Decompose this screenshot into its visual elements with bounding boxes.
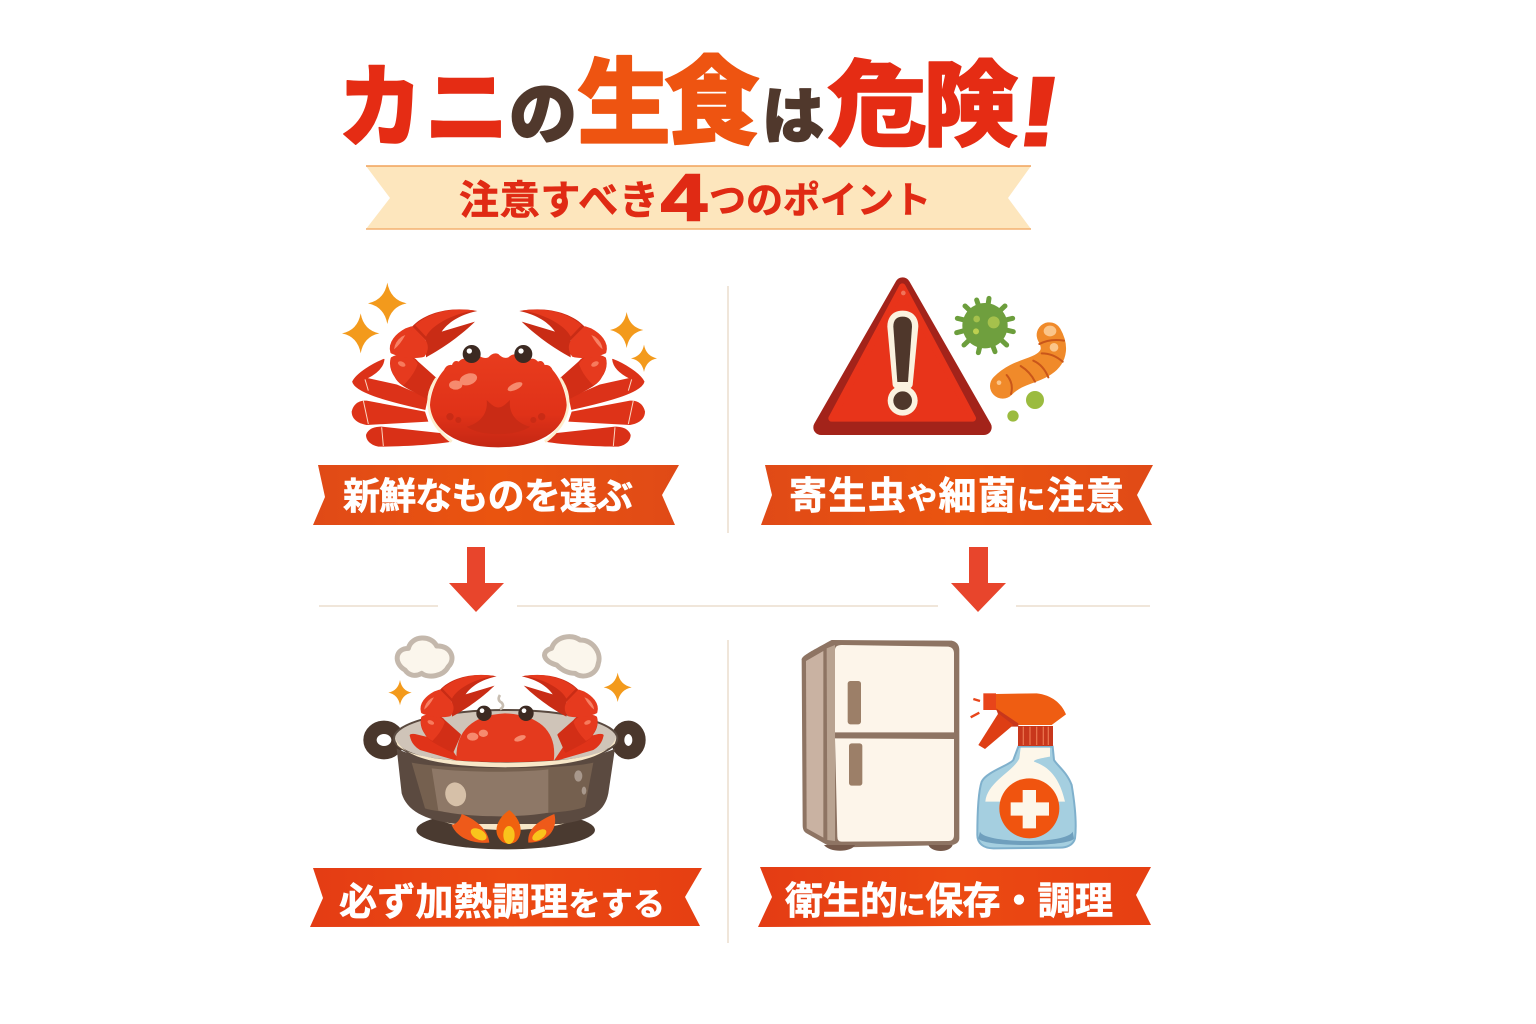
title: 生 (577, 51, 671, 156)
title (338, 50, 1071, 168)
title: カ (338, 58, 423, 159)
title: ! (1008, 56, 1071, 168)
title: ニ (425, 60, 509, 158)
subtitle text (459, 160, 931, 234)
icon: refrigerator (802, 640, 959, 851)
icon: parasite worm (997, 326, 1064, 394)
stove (416, 811, 595, 849)
sparkles (342, 283, 657, 372)
pot body (394, 735, 617, 824)
pot handles (370, 727, 639, 753)
title: 険 (923, 54, 1018, 158)
title: 食 (664, 50, 760, 157)
exclamation mark (887, 311, 918, 416)
icon: warning triangle (821, 285, 984, 427)
crab in pot (410, 675, 604, 763)
banner: fresh: 新鮮なものを選ぶ (343, 466, 633, 520)
sparkles (388, 673, 632, 705)
flames (452, 810, 555, 844)
dividers (319, 286, 1150, 943)
subtitle text: 注意すべき (459, 168, 659, 226)
crab eyes (463, 345, 532, 363)
icon: green spores (1007, 391, 1044, 422)
crab shell (429, 353, 568, 447)
icon: boiling pot (370, 637, 639, 849)
banner: parasites: 寄生虫や細菌に注意 (789, 465, 1124, 520)
subtitle text: 4 (661, 160, 707, 234)
pot rim (394, 710, 617, 767)
icon: fresh crab (342, 283, 657, 447)
title: の (509, 77, 577, 153)
steam (397, 637, 599, 676)
crab claws (391, 309, 605, 397)
icon: spray bottle (971, 693, 1076, 848)
subtitle text: つのポイント (709, 170, 931, 224)
title: は (762, 83, 824, 152)
arrows (449, 547, 1006, 612)
icon: germ (957, 298, 1013, 353)
subtitle ribbon (366, 160, 1031, 234)
crab legs (352, 359, 645, 447)
banner: hygiene: 衛生的に保存・調理 (785, 870, 1113, 925)
banner: cook: 必ず加熱調理をする (339, 871, 665, 926)
title: 危 (827, 55, 927, 158)
